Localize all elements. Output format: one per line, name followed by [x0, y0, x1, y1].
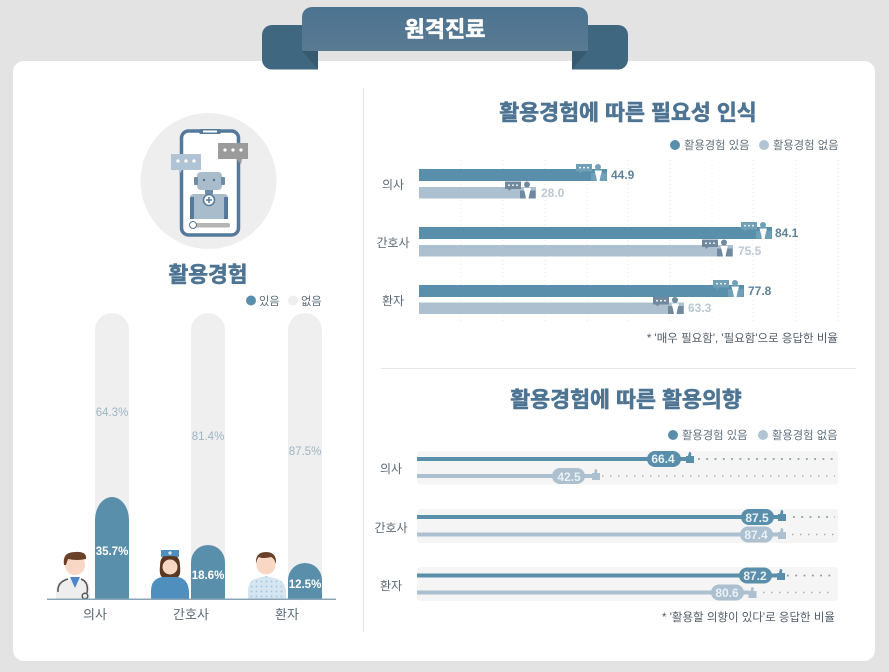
icon: nurse	[151, 550, 189, 599]
bar chart: usage rates	[47, 313, 336, 622]
row: patient: 환자	[380, 579, 402, 593]
row: doctor: 의사	[380, 462, 402, 476]
icon: patient	[248, 552, 286, 599]
bar: patient	[288, 313, 322, 599]
vertical divider	[363, 88, 364, 632]
row: nurse: 84.1	[775, 226, 799, 240]
panel: perceived need by experience	[376, 100, 838, 345]
icon: doctor	[56, 552, 90, 599]
bar: nurse: 81.4%	[192, 431, 224, 443]
category labels: 간호사	[173, 607, 209, 622]
grid lines	[461, 160, 838, 322]
row: patient: 77.8	[748, 284, 772, 298]
footnote: intention to use: * '활용할 의향이 있다'로 응답한 비율	[662, 610, 835, 624]
row: nurse: 87.5	[745, 511, 769, 525]
category labels: 환자	[275, 607, 299, 622]
row: patient	[380, 568, 835, 600]
bar chart: perceived need	[376, 164, 799, 315]
row: patient: 63.3	[688, 301, 712, 315]
heading: intention to use: 활용경험에 따른 활용의향	[510, 387, 742, 412]
legend: intention to use: 활용경험 있음	[682, 428, 748, 442]
bar: nurse: 18.6%	[192, 570, 224, 582]
bar: patient: 87.5%	[289, 446, 321, 458]
title ribbon	[262, 7, 628, 70]
title: 원격진료	[405, 17, 485, 42]
row: nurse: 75.5	[738, 244, 762, 258]
row: doctor: 28.0	[541, 186, 565, 200]
category labels	[83, 607, 299, 622]
heading: perceived need: 활용경험에 따른 필요성 인식	[499, 100, 757, 125]
legend: intention to use: 활용경험 없음	[772, 428, 838, 442]
legend: perceived need: 활용경험 있음	[684, 138, 750, 152]
footnote: perceived need: * '매우 필요함', '필요함'으로 응답한 비율	[647, 332, 838, 345]
row: doctor	[382, 164, 635, 200]
row: doctor: 42.5	[557, 470, 581, 484]
axis	[47, 598, 336, 600]
row: patient: 80.6	[715, 586, 739, 600]
row: patient: 87.2	[743, 569, 767, 583]
bar: patient: 12.5%	[289, 579, 321, 591]
row: nurse: 간호사	[376, 236, 410, 250]
legend: perceived need: 활용경험 없음	[773, 138, 838, 152]
legend: perceived need	[670, 138, 838, 152]
row: patient: 환자	[382, 294, 404, 308]
bar: nurse	[191, 313, 225, 599]
row: patient	[382, 280, 772, 315]
legend: usage experience: 있음	[259, 295, 280, 308]
legend: intention to use	[668, 428, 838, 442]
bar: doctor: 35.7%	[96, 546, 128, 558]
row: nurse: 간호사	[374, 521, 408, 535]
panel: intention to use by experience	[374, 387, 838, 624]
row: nurse	[374, 509, 835, 542]
bar: doctor: 64.3%	[96, 407, 128, 419]
panel: usage experience	[47, 113, 336, 622]
legend: usage experience	[246, 295, 322, 308]
legend: usage experience: 없음	[301, 295, 322, 308]
horizontal divider	[381, 368, 856, 369]
row: doctor	[380, 451, 835, 484]
heading: usage experience: 활용경험	[168, 263, 248, 287]
icon: phone with robot doctor	[140, 113, 276, 249]
bar: doctor	[95, 313, 129, 599]
row: doctor: 44.9	[611, 168, 635, 182]
row: doctor: 66.4	[651, 452, 675, 466]
row: nurse: 87.4	[744, 528, 768, 542]
row: nurse	[376, 222, 799, 258]
row: doctor: 의사	[382, 178, 404, 192]
category labels: 의사	[83, 607, 107, 622]
lollipop chart: intention to use	[374, 451, 835, 600]
tracks	[417, 451, 838, 601]
